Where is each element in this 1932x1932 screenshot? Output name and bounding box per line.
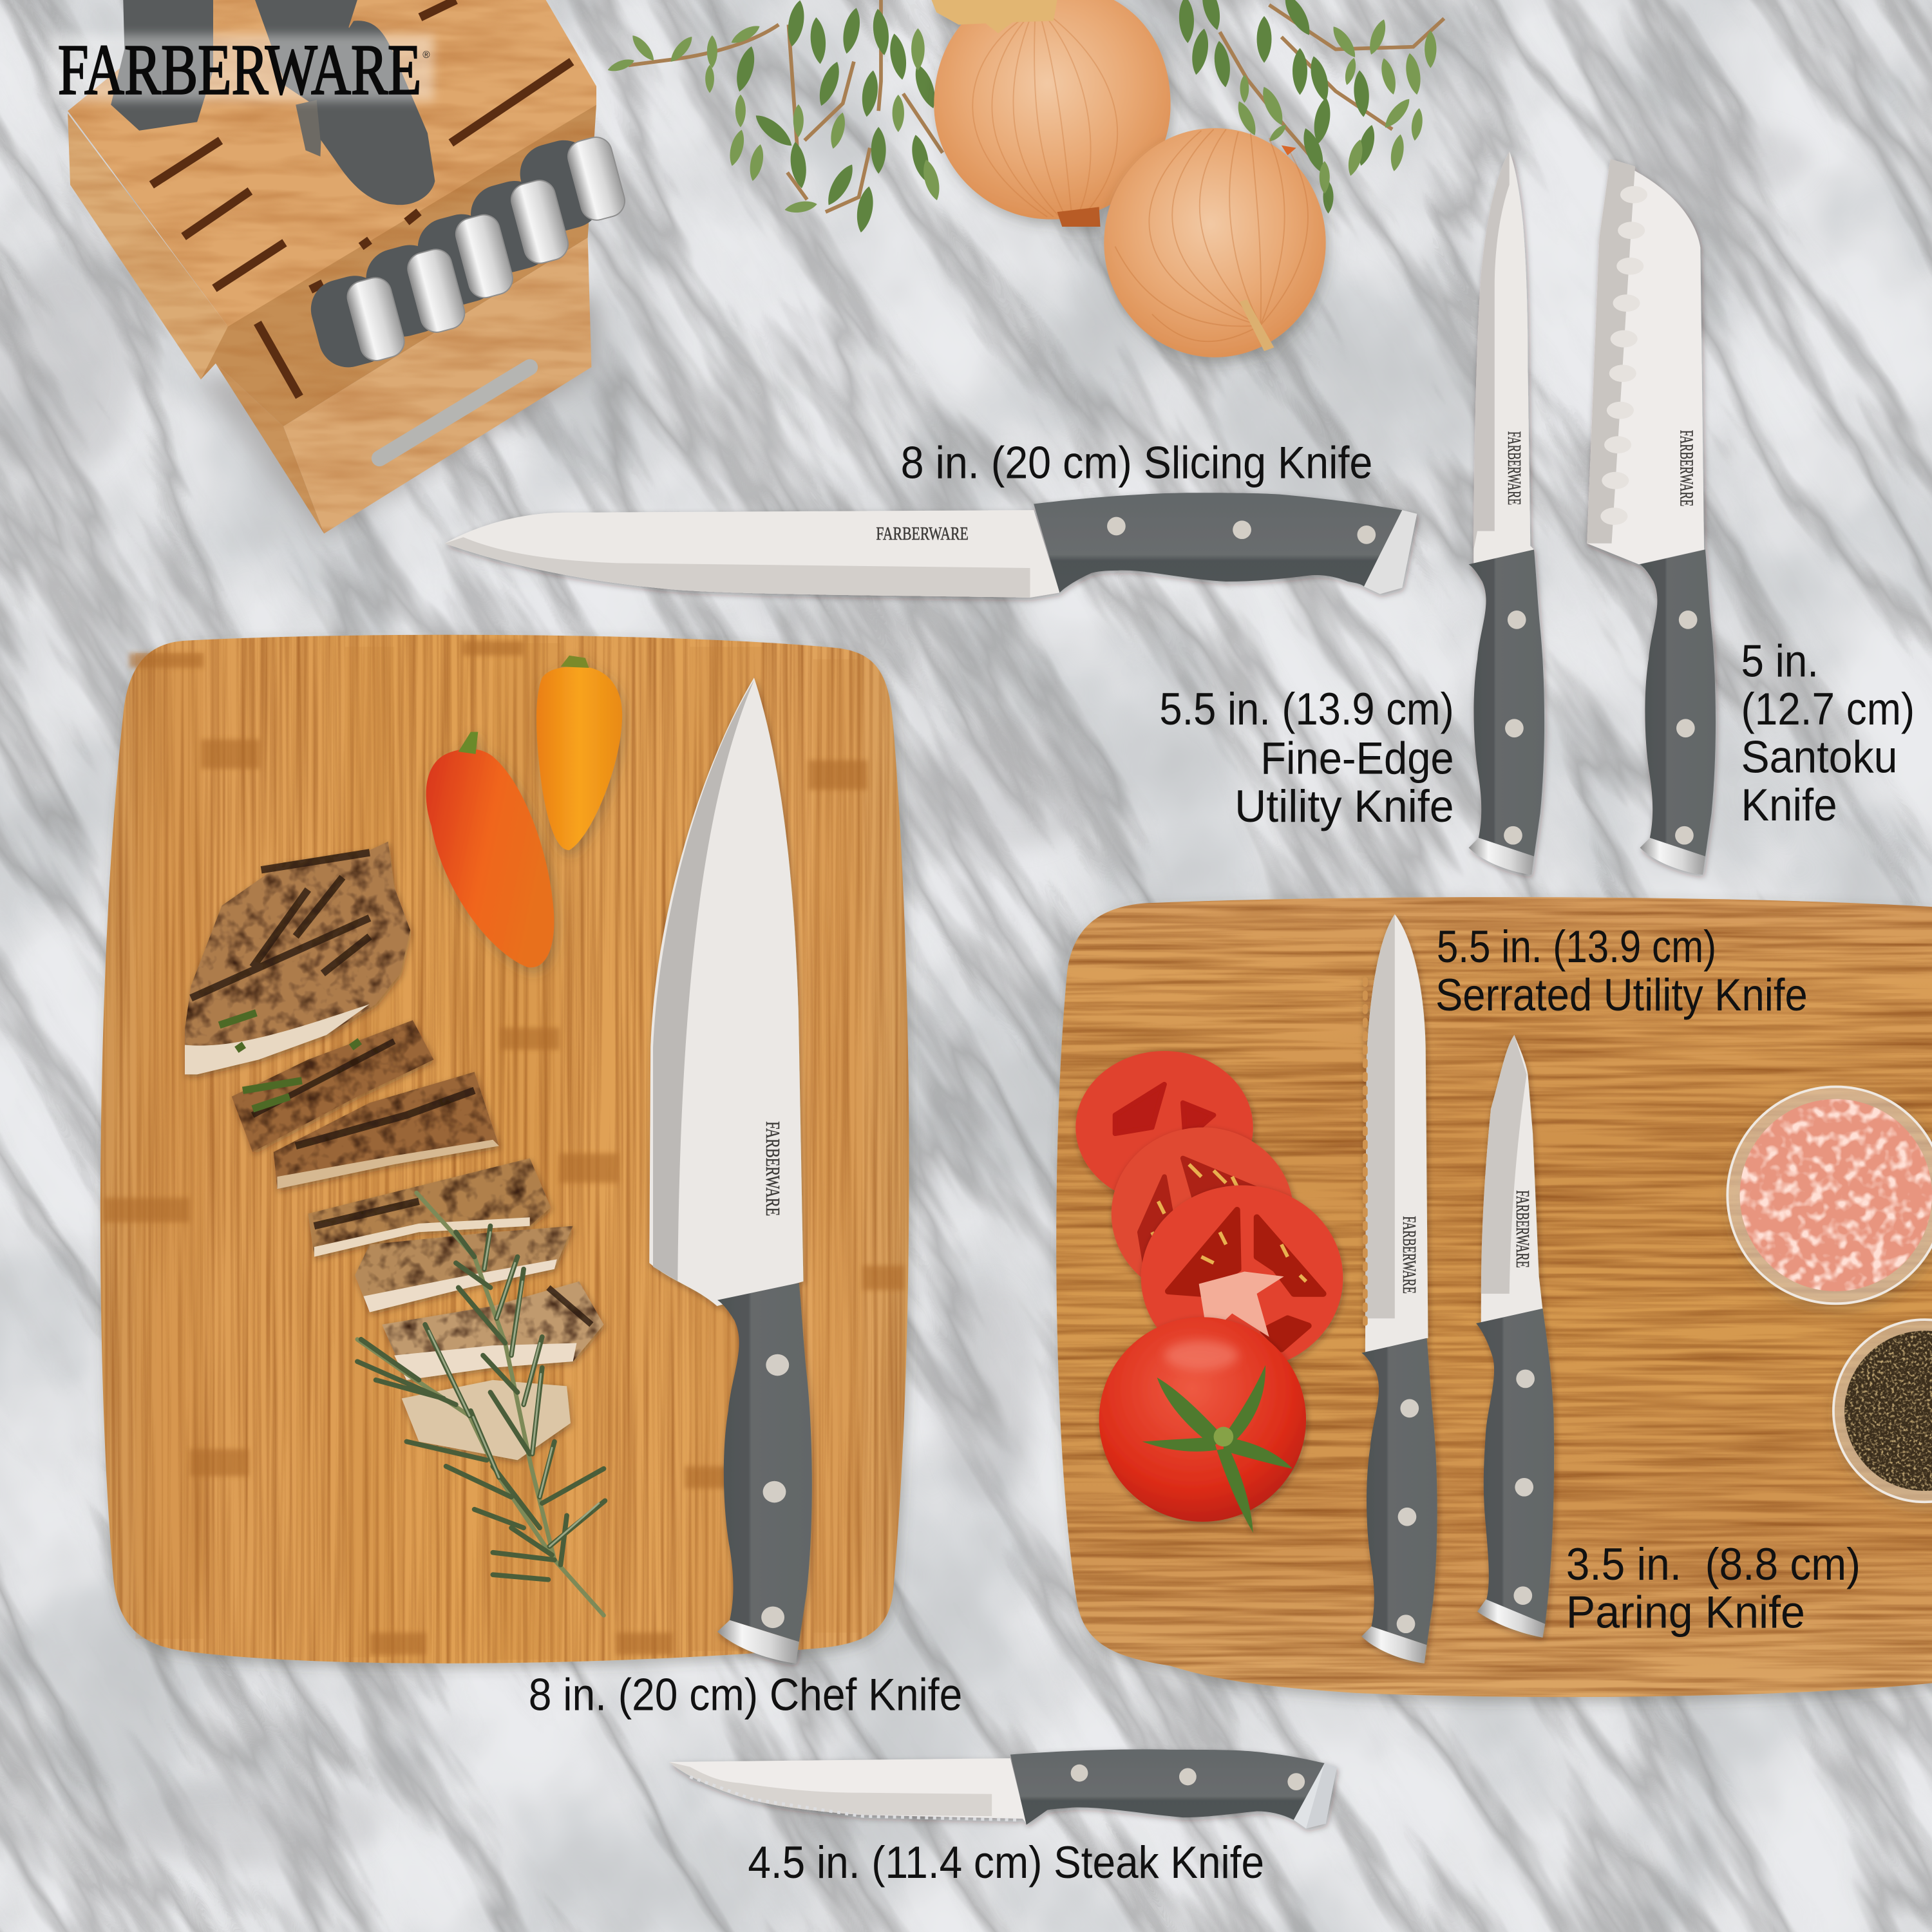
- chicken slice 6: [382, 1282, 604, 1380]
- blade bevel: [1365, 914, 1395, 1318]
- knife block: [68, 0, 629, 537]
- serrated utility knife: [1361, 914, 1437, 1663]
- inserted knife handles: [111, 0, 435, 205]
- blade bevel: [1473, 151, 1510, 549]
- label: serrated utility knife: Serrated Utility Knife: [1435, 970, 1808, 1021]
- yellow-orange pepper: [536, 656, 622, 850]
- steel cap: [1364, 510, 1417, 594]
- blade brand: FARBERWARE: [1676, 430, 1697, 506]
- brand logo: ®: [422, 50, 430, 61]
- herbs: right sprig: [1178, 0, 1444, 214]
- blade brand: FARBERWARE: [762, 1121, 784, 1216]
- blade brand: FARBERWARE: [1504, 431, 1524, 505]
- slicing knife: [445, 493, 1417, 598]
- steel block badge: [379, 367, 530, 459]
- block shadow: [197, 296, 598, 537]
- blade: [1365, 914, 1428, 1353]
- row of steel-capped handles: [305, 134, 629, 374]
- blade: [1473, 151, 1534, 564]
- label: utility knife: 5.5 in. (13.9 cm): [1159, 684, 1454, 735]
- blade brand: FARBERWARE: [1399, 1216, 1419, 1294]
- hollow-edge band: [1587, 159, 1635, 544]
- rivets: [1071, 1765, 1305, 1790]
- pepper bowl: [1833, 1320, 1932, 1502]
- label: santoku knife: [1741, 636, 1915, 831]
- onion upper: [931, 0, 1171, 227]
- chicken slice 3: [274, 1072, 499, 1189]
- steak knife: [669, 1749, 1337, 1828]
- blade: [649, 677, 803, 1306]
- blade: [1481, 1035, 1542, 1323]
- handle: [1469, 549, 1544, 875]
- brand logo: FARBERWARE: [58, 30, 421, 109]
- cutting board left: [100, 635, 909, 1663]
- block lower tier: [201, 105, 596, 533]
- label: santoku knife: 5 in.: [1741, 636, 1819, 687]
- utility knife: [1469, 151, 1544, 875]
- onion lower: [1104, 128, 1326, 357]
- cutting board right: [1056, 897, 1932, 1697]
- paring knife: [1476, 1035, 1554, 1638]
- label: serrated utility knife: 5.5 in. (13.9 cm): [1437, 922, 1716, 972]
- label: paring knife: [1566, 1539, 1861, 1638]
- orange-red pepper: [426, 732, 554, 967]
- rivets: [1107, 517, 1376, 544]
- chicken slice 7: [402, 1380, 571, 1460]
- blade bevel: [1481, 1035, 1527, 1294]
- chicken slice 2: [232, 1020, 433, 1152]
- tomato slices: [1075, 1051, 1343, 1533]
- chicken slices: [185, 842, 604, 1460]
- chef knife: [649, 677, 812, 1663]
- blade brand: FARBERWARE: [1512, 1190, 1533, 1268]
- label: santoku knife: Santoku: [1741, 732, 1897, 783]
- handle: [717, 1283, 812, 1663]
- label: paring knife: Paring Knife: [1566, 1587, 1805, 1638]
- chicken slice 5: [355, 1226, 573, 1312]
- label: paring knife: 3.5 in. (8.8 cm): [1566, 1539, 1861, 1590]
- handle: [1010, 1749, 1325, 1825]
- label: utility knife: [1159, 684, 1454, 832]
- label: steak knife: 4.5 in. (11.4 cm) Steak Knife: [748, 1837, 1264, 1888]
- block upper tier: [68, 0, 596, 379]
- blade brand: FARBERWARE: [876, 524, 969, 544]
- label: slicing knife: 8 in. (20 cm) Slicing Knife: [901, 437, 1372, 488]
- blade bevel: [669, 1762, 992, 1816]
- label: utility knife: Utility Knife: [1235, 781, 1454, 832]
- label: serrated utility knife: [1435, 922, 1808, 1021]
- whole tomato: [1099, 1317, 1306, 1533]
- blade: [445, 510, 1059, 598]
- blade: [1587, 159, 1704, 564]
- onions: [931, 0, 1326, 357]
- blade: [669, 1758, 1027, 1824]
- knife slots: [151, 0, 572, 397]
- label: santoku knife: Knife: [1741, 780, 1837, 831]
- chicken slice 4: [308, 1158, 551, 1257]
- label: chef knife: 8 in. (20 cm) Chef Knife: [529, 1670, 962, 1721]
- handle: [1476, 1309, 1554, 1624]
- santoku knife: [1587, 159, 1716, 875]
- salt bowl: [1727, 1087, 1932, 1303]
- steel cap: [1477, 1599, 1545, 1638]
- handle: [1361, 1338, 1437, 1663]
- handle: [1640, 549, 1716, 875]
- chicken slice 1: [185, 842, 410, 1074]
- tomato slice 2: [1112, 1128, 1294, 1300]
- herbs: left sprig: [606, 0, 943, 234]
- bamboo bands and knots on left board: [104, 641, 904, 1660]
- tomato slice 1: [1075, 1051, 1253, 1204]
- rivets: [1513, 1370, 1535, 1605]
- rosemary sprig: [357, 1193, 605, 1615]
- label: santoku knife: (12.7 cm): [1741, 684, 1915, 735]
- steel cap: [1294, 1763, 1337, 1828]
- tomato slice 3: [1141, 1186, 1343, 1370]
- granton dimples: [1600, 186, 1647, 525]
- label: utility knife: Fine-Edge: [1260, 734, 1454, 784]
- handle: [1034, 493, 1402, 592]
